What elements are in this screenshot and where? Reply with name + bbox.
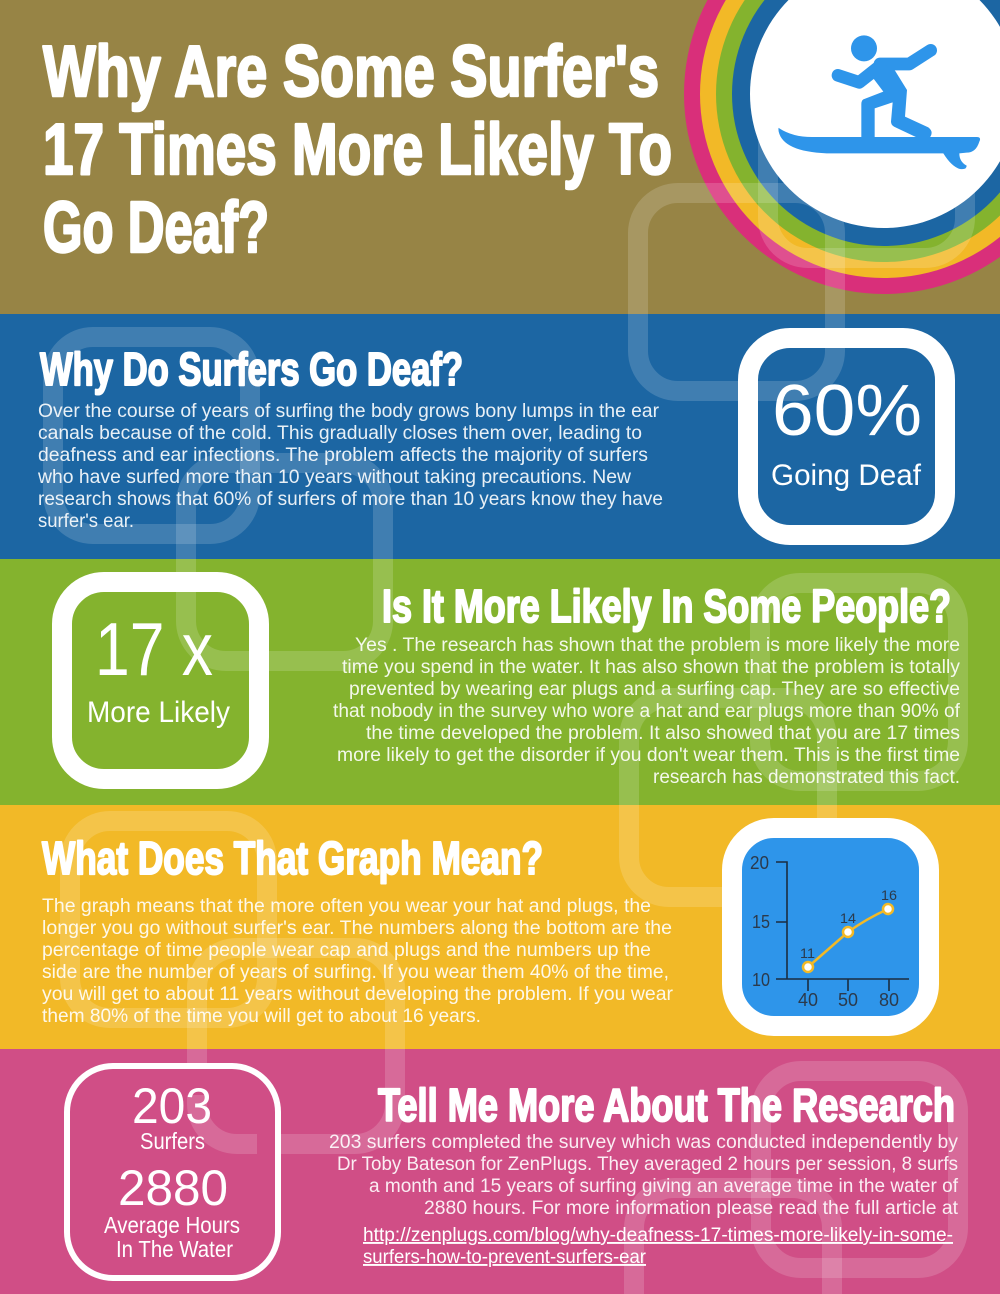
text block: deafness explanation: surfer's ear. bbox=[38, 511, 134, 532]
chart: years without surfer's ear vs percentage of wear: 20 bbox=[750, 853, 769, 873]
text block: research details bbox=[329, 1132, 959, 1219]
stat box: survey size and hours: 203 bbox=[132, 1078, 212, 1134]
stat box: survey size and hours: Surfers bbox=[140, 1128, 205, 1154]
text block: deafness explanation: who have surfed more than 10 years without taking precautions. New bbox=[37, 467, 631, 488]
heading: what does that graph mean: What Does That Graph Mean? bbox=[42, 832, 543, 884]
stat box: 60% going deaf: 60% bbox=[772, 371, 922, 451]
stat box: 17 x more likely: More Likely bbox=[87, 696, 230, 729]
chart: years without surfer's ear vs percentage of wear: 40 bbox=[798, 990, 818, 1010]
icon: surfer on board bbox=[778, 35, 980, 169]
text block: research findings: prevented by wearing ear plugs and a surfing cap. They are so effective bbox=[349, 679, 960, 700]
chart: years without surfer's ear vs percentage of wear bbox=[732, 828, 929, 1026]
text block: graph explanation: The graph means that the more often you wear your hat and plugs, the bbox=[42, 896, 651, 917]
chart: years without surfer's ear vs percentage of wear: 11 bbox=[800, 945, 815, 961]
text block: research details: a month and 15 years of surfing giving an average time in the water of bbox=[369, 1176, 959, 1197]
chart: years without surfer's ear vs percentage of wear: 10 bbox=[752, 970, 770, 990]
text block: graph explanation: side are the number of years of surfing. If you wear them 40% of the time, bbox=[42, 962, 669, 983]
title: 17 Times More Likely To bbox=[43, 110, 672, 190]
link: full article bbox=[363, 1225, 953, 1268]
stat box: survey size and hours: 2880 bbox=[118, 1160, 228, 1216]
chart: years without surfer's ear vs percentage of wear: 50 bbox=[838, 990, 858, 1010]
stat box: survey size and hours: In The Water bbox=[116, 1236, 233, 1262]
band: graph explanation bbox=[0, 805, 1000, 1049]
text block: research findings bbox=[333, 635, 961, 788]
stat box: 17 x more likely bbox=[62, 582, 259, 779]
text block: research findings: research has demonstrated this fact. bbox=[653, 767, 960, 788]
text block: graph explanation: longer you go without surfer's ear. The numbers along the bottom are the bbox=[42, 918, 672, 939]
band: why do surfers go deaf bbox=[0, 314, 1000, 559]
text block: research findings: Yes . The research has shown that the problem is more likely the more bbox=[355, 635, 960, 656]
text block: research findings: more likely to get the disorder if you don't wear them. This is the first time bbox=[337, 745, 960, 766]
title: Why Are Some Surfer's bbox=[43, 32, 659, 112]
stat box: survey size and hours bbox=[67, 1066, 278, 1278]
text block: research findings: time you spend in the water. It has also shown that the problem is totally bbox=[342, 657, 960, 678]
text block: deafness explanation: deafness and ear infections. The problem affects the majority of surfers bbox=[38, 445, 648, 466]
link: full article: surfers-how-to-prevent-surfers-ear bbox=[363, 1247, 647, 1268]
text block: research details: 2880 hours. For more information please read the full article at bbox=[424, 1198, 959, 1219]
title: Go Deaf? bbox=[43, 188, 269, 268]
text block: deafness explanation bbox=[37, 401, 663, 532]
text block: deafness explanation: Over the course of years of surfing the body grows bony lumps in the ear bbox=[38, 401, 660, 422]
text block: deafness explanation: canals because of the cold. This gradually closes them over, leading to bbox=[38, 423, 642, 444]
stat box: 60% going deaf bbox=[748, 338, 945, 535]
link: full article: http://zenplugs.com/blog/why-deafness-17-times-more-likely-in-some- bbox=[363, 1225, 953, 1246]
chart: years without surfer's ear vs percentage of wear: 15 bbox=[752, 912, 770, 932]
stat box: 17 x more likely: 17 x bbox=[95, 607, 213, 691]
stat box: survey size and hours: Average Hours bbox=[104, 1212, 240, 1238]
chart: years without surfer's ear vs percentage of wear: 80 bbox=[879, 990, 899, 1010]
text block: graph explanation: percentage of time people wear cap and plugs and the numbers up the bbox=[42, 940, 651, 961]
stat box: 60% going deaf: Going Deaf bbox=[771, 459, 922, 492]
chart: years without surfer's ear vs percentage of wear: 14 bbox=[840, 910, 856, 926]
chart: years without surfer's ear vs percentage of wear: 16 bbox=[881, 887, 897, 903]
title bbox=[43, 32, 672, 268]
text block: graph explanation: them 80% of the time you will get to about 16 years. bbox=[42, 1006, 481, 1027]
icon: rainbow rings bbox=[684, 0, 1000, 294]
text block: research findings: the time developed the problem. It also showed that you are 17 times bbox=[366, 723, 960, 744]
text block: research details: 203 surfers completed the survey which was conducted independently by bbox=[329, 1132, 959, 1153]
band: title background bbox=[0, 0, 1000, 314]
text block: graph explanation bbox=[42, 896, 674, 1027]
heading: why do surfers go deaf: Why Do Surfers Go Deaf? bbox=[40, 343, 463, 395]
text block: research details: Dr Toby Bateson for ZenPlugs. They averaged 2 hours per session, 8 surfs bbox=[337, 1154, 958, 1175]
text block: graph explanation: you will get to about 11 years without developing the problem. If you wear bbox=[42, 984, 674, 1005]
text block: research findings: that nobody in the survey who wore a hat and ear plugs more than 90% of bbox=[333, 701, 961, 722]
band: research bbox=[0, 1049, 1000, 1294]
text block: deafness explanation: research shows that 60% of surfers of more than 10 years know they have bbox=[38, 489, 663, 510]
band: is it more likely bbox=[0, 559, 1000, 805]
